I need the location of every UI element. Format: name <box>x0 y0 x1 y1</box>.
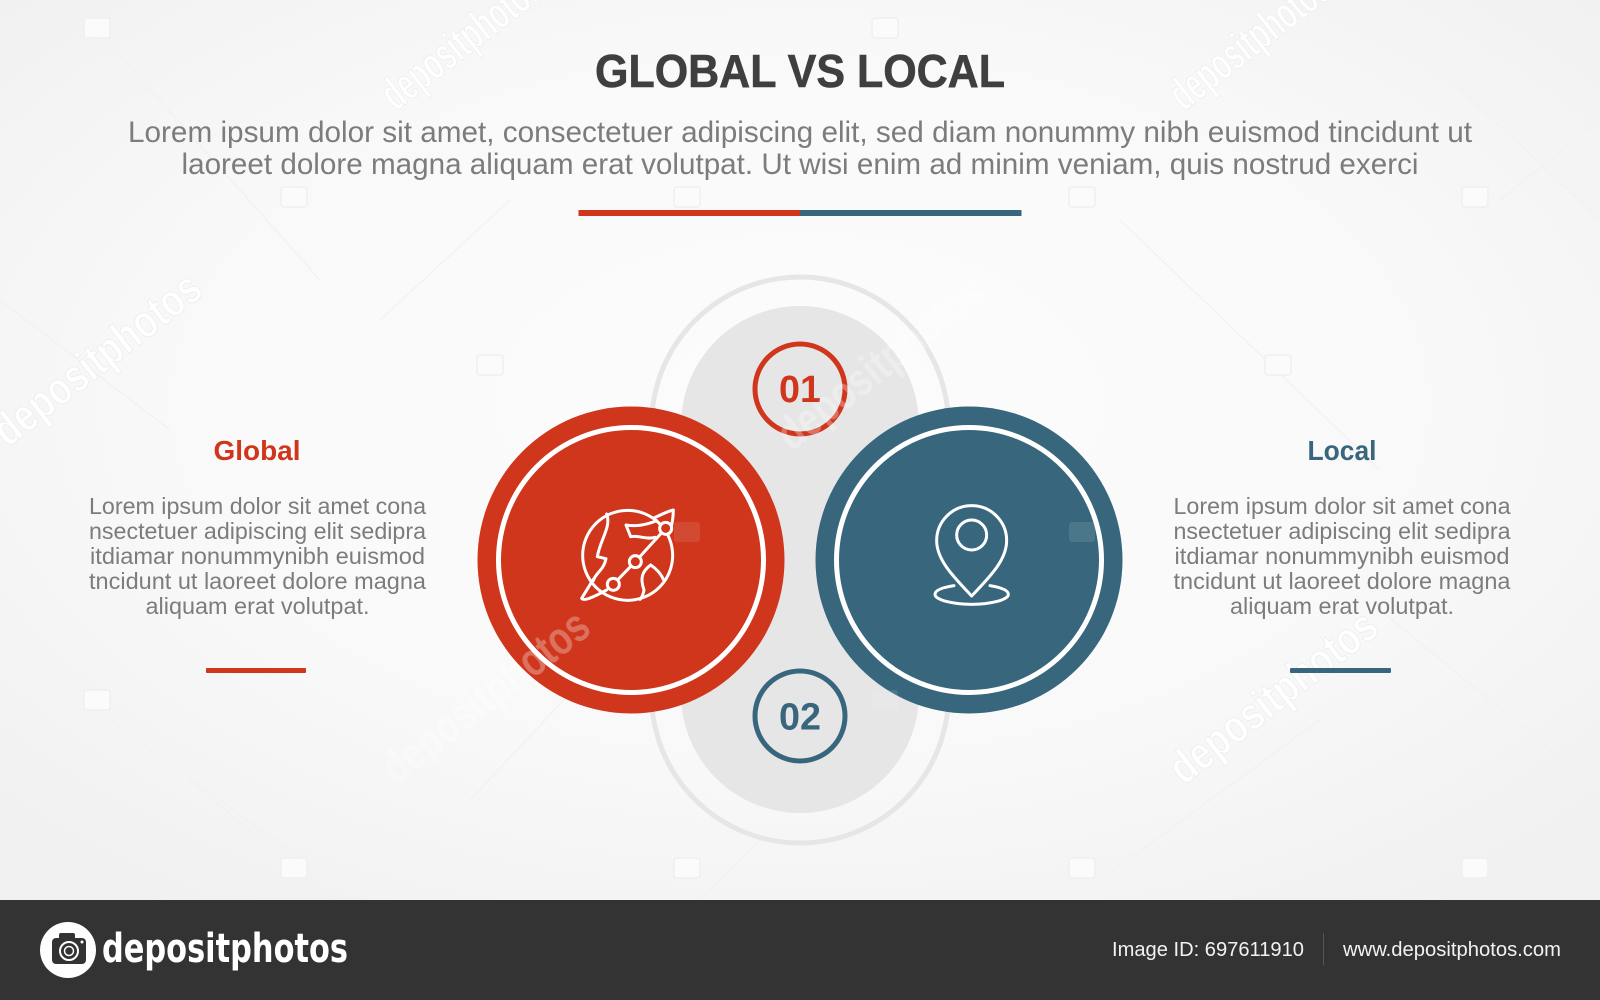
number badge 02 <box>755 671 845 761</box>
body text: Local: aliquam erat volutpat. <box>1230 593 1454 619</box>
number badge 01: 01 <box>779 369 821 411</box>
subtitle: laoreet dolore magna aliquam erat volutpat. Ut wisi enim ad minim veniam, quis nostrud exerci <box>182 148 1418 181</box>
body text: Local: itdiamar nonummynibh euismod <box>1174 543 1510 569</box>
body text: Global: Lorem ipsum dolor sit amet cona <box>89 493 426 519</box>
translucent watermark overlay <box>370 265 1095 794</box>
body text: Global <box>89 493 426 619</box>
footer bar <box>0 900 1600 1000</box>
red global circle <box>478 406 784 714</box>
body text: Global: nsectetuer adipiscing elit sedipra <box>89 518 426 544</box>
body text: Global: itdiamar nonummynibh euismod <box>90 543 425 569</box>
icon: footer camera logo <box>40 922 96 978</box>
body text: Local <box>1174 493 1511 619</box>
subtitle <box>128 116 1473 181</box>
watermark camera icons <box>84 18 1488 878</box>
heading: Global: Global <box>214 435 300 466</box>
number badge 02: 02 <box>779 696 821 738</box>
body text: Global: aliquam erat volutpat. <box>146 593 370 619</box>
watermark text: depositphotos <box>1158 599 1387 794</box>
title divider bar <box>578 210 1022 216</box>
outer capsule outline <box>652 277 948 843</box>
translucent watermark overlay: depositphotos <box>766 265 995 460</box>
footer logo wordmark: depositphotos <box>102 926 348 972</box>
right text block: Local <box>1174 435 1511 673</box>
number badge 01 <box>755 344 845 434</box>
accent line: Global <box>206 668 306 673</box>
icon: globe with route <box>582 510 673 600</box>
translucent watermark overlay: depositphotos <box>370 599 599 794</box>
body text: Local: Lorem ipsum dolor sit amet cona <box>1174 493 1511 519</box>
subtitle: Lorem ipsum dolor sit amet, consectetuer adipiscing elit, sed diam nonummy nibh euismod tincidunt ut <box>128 116 1473 149</box>
left text block: Global <box>89 435 426 673</box>
watermark text <box>0 0 1387 794</box>
icon: location pin <box>935 506 1008 604</box>
body text: Global: tncidunt ut laoreet dolore magna <box>89 568 426 594</box>
body text: Local: tncidunt ut laoreet dolore magna <box>1174 568 1511 594</box>
title: GLOBAL VS LOCAL <box>595 45 1005 97</box>
accent line: Local <box>1290 668 1391 673</box>
heading: Local: Local <box>1308 435 1376 466</box>
body text: Local: nsectetuer adipiscing elit sedipra <box>1174 518 1511 544</box>
blue local circle <box>816 406 1122 714</box>
inner gray capsule <box>681 306 919 813</box>
footer website: www.depositphotos.com <box>1342 939 1561 961</box>
footer image id: Image ID: 697611910 <box>1112 939 1304 961</box>
